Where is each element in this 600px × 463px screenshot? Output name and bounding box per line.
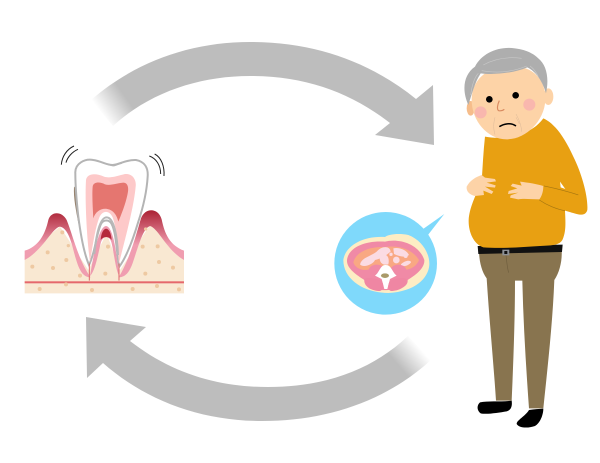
hair strands xyxy=(471,58,538,95)
right hand xyxy=(508,182,543,199)
hair xyxy=(464,48,547,105)
back muscles xyxy=(364,278,383,291)
jaw bone xyxy=(25,225,184,293)
sweater xyxy=(469,118,587,248)
callout: abdominal cross-section bubble xyxy=(334,212,444,315)
root canals xyxy=(89,263,119,281)
inner root curve xyxy=(94,217,118,255)
bone line xyxy=(25,281,184,283)
arrow: top, from tooth to person xyxy=(91,42,434,145)
mouth xyxy=(499,124,516,127)
dentin xyxy=(86,174,136,263)
left shoe xyxy=(478,401,512,414)
left gum tissue xyxy=(25,213,91,277)
spine xyxy=(375,265,397,289)
icon: loose tooth with periodontal disease xyxy=(25,146,184,293)
left ear xyxy=(467,101,475,116)
pulp chamber xyxy=(92,183,128,222)
trousers xyxy=(478,245,563,428)
eyes xyxy=(486,96,493,103)
bone dots xyxy=(30,227,181,292)
arrow: bottom, from person to tooth xyxy=(86,317,431,421)
wrinkles xyxy=(494,114,522,135)
right gum tissue xyxy=(119,210,184,277)
cheeks xyxy=(475,106,487,118)
sleeve cuff line xyxy=(539,186,578,211)
intestines xyxy=(360,247,411,266)
tooth body xyxy=(75,160,148,267)
belt xyxy=(478,245,563,254)
visceral fat xyxy=(353,247,419,270)
crown crease xyxy=(103,163,122,166)
right ear xyxy=(543,88,553,105)
muscle layer xyxy=(347,241,424,290)
armpit gap xyxy=(560,182,565,189)
tartar deposits xyxy=(74,187,82,225)
nose xyxy=(497,101,504,111)
side muscles xyxy=(369,265,385,277)
gum between roots xyxy=(90,226,119,276)
right shoe xyxy=(517,409,543,428)
body outline xyxy=(343,234,429,293)
bubble xyxy=(334,212,437,315)
wobble lines xyxy=(61,146,164,176)
figure: elderly man holding stomach xyxy=(464,48,587,428)
left hand xyxy=(467,175,496,196)
face xyxy=(472,66,545,139)
trouser fly xyxy=(506,255,509,273)
